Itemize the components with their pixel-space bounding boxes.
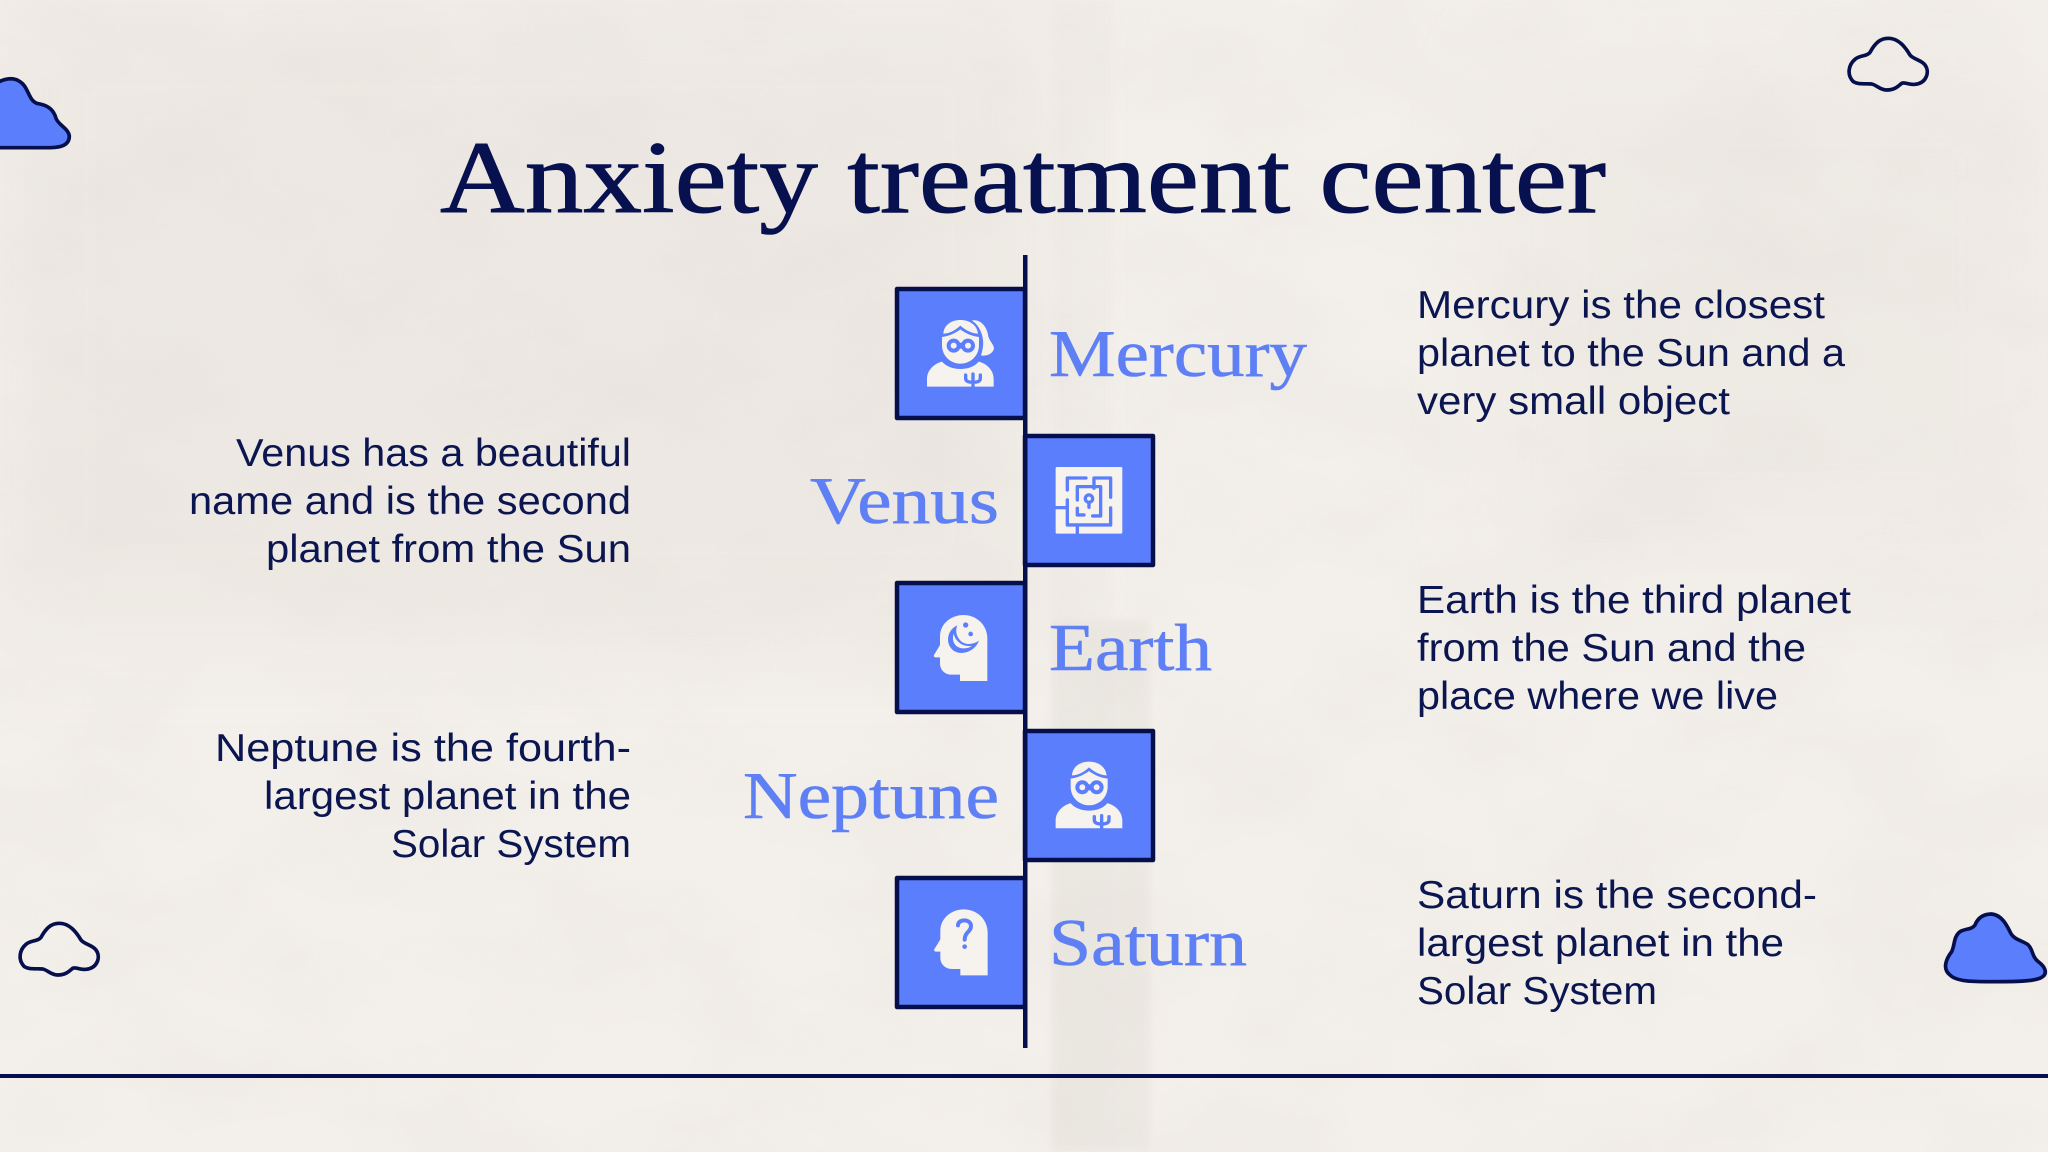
cloud: bottom left outline [20,923,98,975]
label: Saturn: Saturn [1049,906,1247,980]
description: Saturn: largest planet in the [1417,922,1784,965]
central vertical axis [1023,255,1028,1048]
row: Mercury [897,284,1845,423]
description: Mercury: Mercury is the closest [1417,284,1825,327]
description: Earth: from the Sun and the [1417,627,1806,670]
description: Neptune: Solar System [391,823,631,866]
description: Venus: Venus has a beautiful [236,432,631,475]
description: Neptune: Neptune is the fourth- [215,727,631,770]
row: Earth [897,579,1851,718]
description: Saturn: Saturn is the second- [1417,874,1817,917]
description: Mercury: very small object [1417,380,1730,423]
description: Neptune: largest planet in the [264,775,631,818]
description: Mercury: planet to the Sun and a [1417,332,1845,375]
cloud: top left filled [0,79,69,148]
description: Earth [1417,579,1851,718]
icon box: Earth, head with moon [897,583,1025,712]
row: Venus [189,432,1153,571]
icon box: Venus, maze [1025,436,1153,565]
cloud: top right outline [1849,38,1927,90]
bottom horizontal line [0,1074,2048,1078]
label: Mercury: Mercury [1049,317,1308,391]
row: Neptune [215,727,1153,866]
description: Saturn: Solar System [1417,970,1657,1013]
icon box: Neptune, man with goggles [1025,731,1153,860]
row: Saturn [897,874,1817,1013]
description: Earth: place where we live [1417,675,1778,718]
cloud: bottom right filled [1946,914,2045,982]
description: Venus: name and is the second [189,480,631,523]
description: Venus [189,432,631,571]
description: Saturn [1417,874,1817,1013]
label: Earth: Earth [1049,611,1212,685]
label: Neptune: Neptune [743,759,999,833]
description: Earth: Earth is the third planet [1417,579,1851,622]
title: Anxiety treatment center [440,121,1606,235]
description: Venus: planet from the Sun [266,528,631,571]
label: Venus: Venus [810,464,999,538]
description: Mercury [1417,284,1845,423]
description: Neptune [215,727,631,866]
icon box: Mercury, woman with goggles [897,289,1025,418]
icon box: Saturn, head with question mark [897,878,1025,1007]
